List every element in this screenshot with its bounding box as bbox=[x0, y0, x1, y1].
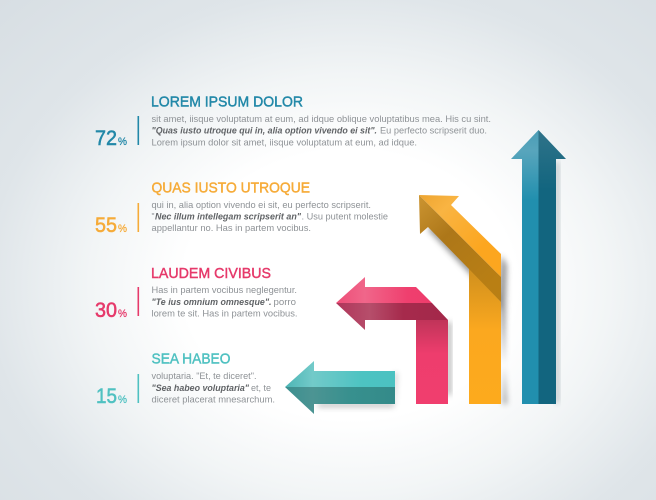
body text: voluptaria. "Et, te diceret". bbox=[152, 371, 256, 381]
arrow: pink bent bbox=[336, 277, 451, 404]
body text: Has in partem vocibus neglegentur. bbox=[152, 285, 297, 295]
percentage 55: % bbox=[118, 223, 127, 235]
body text: . Usu putent molestie bbox=[302, 212, 388, 222]
divider bar blue bbox=[138, 116, 139, 145]
body text: diceret placerat mnesarchum. bbox=[152, 394, 275, 404]
body text bbox=[152, 285, 298, 318]
heading: QUAS IUSTO UTROQUE bbox=[152, 180, 310, 196]
body text: "Sea habeo voluptaria" bbox=[152, 383, 250, 393]
divider bar orange bbox=[138, 203, 139, 232]
block: lorem ipsum dolor bbox=[95, 94, 491, 150]
heading: SEA HABEO bbox=[152, 350, 230, 368]
body text: appellantur no. Has in partem vocibus. bbox=[152, 223, 311, 233]
divider bar teal bbox=[138, 374, 139, 403]
body text: Eu perfecto scripserit duo. bbox=[380, 126, 487, 136]
body text: sit amet, iisque voluptatum at eum, ad idque oblique voluptatibus mea. His cu sint. bbox=[152, 114, 491, 124]
percentage 55: 55 bbox=[95, 214, 117, 237]
heading: LAUDEM CIVIBUS bbox=[151, 265, 271, 282]
arrow: teal left bbox=[285, 361, 397, 414]
body text bbox=[152, 200, 388, 233]
body text: "Quas iusto utroque qui in, alia option vivendo ei sit". bbox=[152, 126, 377, 136]
body text: " bbox=[152, 212, 154, 222]
body text: porro bbox=[274, 297, 296, 307]
percentage 30: % bbox=[118, 308, 127, 320]
percentage 30: 30 bbox=[95, 299, 117, 322]
percentage 15: 15 bbox=[96, 385, 117, 408]
heading: LOREM IPSUM DOLOR bbox=[151, 94, 303, 110]
percentage 72: % bbox=[118, 136, 127, 148]
shadow bbox=[447, 322, 451, 395]
block: quas iusto utroque bbox=[95, 180, 388, 237]
body text: Nec illum intellegam scripserit an" bbox=[155, 212, 302, 222]
body text: et, te bbox=[251, 383, 271, 393]
arrow: orange bent bbox=[419, 195, 507, 404]
percentage 15: % bbox=[118, 394, 127, 406]
shadow bbox=[318, 373, 397, 407]
arrow: blue upward bbox=[511, 130, 566, 404]
body text: qui in, alia option vivendo ei sit, eu perfecto scripserit. bbox=[152, 200, 371, 210]
block: sea habeo bbox=[96, 350, 275, 408]
body text: "Te ius omnium omnesque". bbox=[152, 297, 272, 307]
block: laudem civibus bbox=[95, 265, 298, 322]
body text bbox=[152, 114, 491, 148]
percentage 72: 72 bbox=[95, 127, 117, 150]
divider bar pink bbox=[138, 287, 139, 316]
body text: Lorem ipsum dolor sit amet, iisque voluptatum at eum, ad idque. bbox=[152, 138, 417, 148]
shadow bbox=[428, 224, 507, 404]
body text bbox=[152, 371, 275, 404]
body text: lorem te sit. Has in partem vocibus. bbox=[152, 308, 298, 318]
